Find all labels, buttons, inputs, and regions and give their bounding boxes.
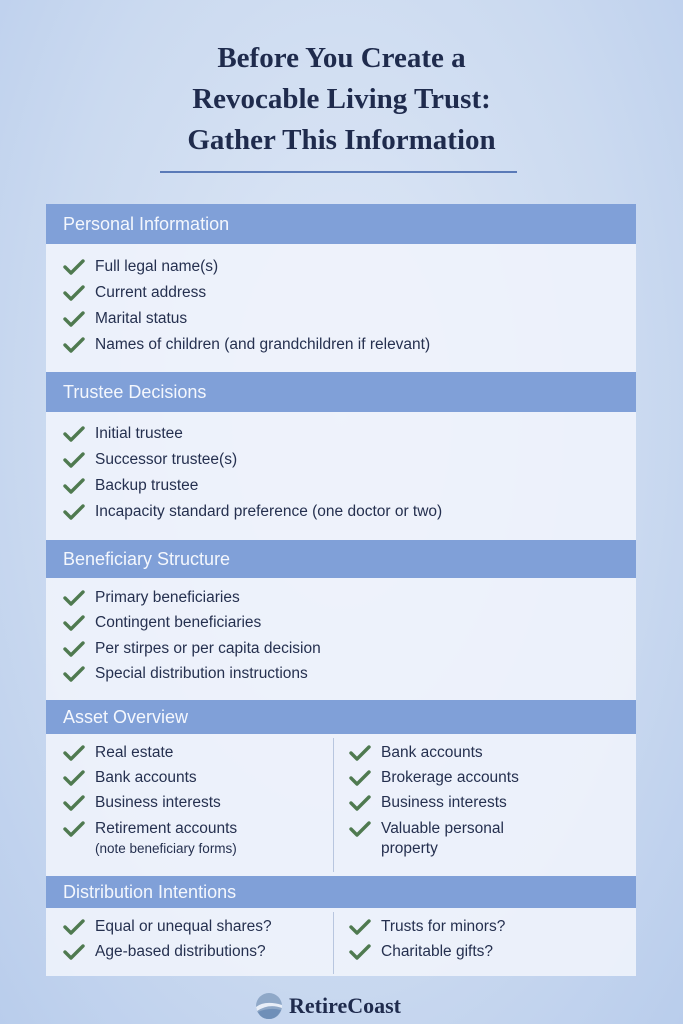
checklist items: Special distribution instructions [95,665,308,682]
heading: distribution intentions: Distribution Intentions [63,882,236,902]
checklist items: Full legal name(s) [95,258,218,275]
title [187,42,496,156]
checklist items: Per stirpes or per capita decision [95,640,321,657]
checklist items: Retirement accounts [95,820,237,837]
body: distribution intentions [46,908,636,976]
panel: trustee decisions [46,372,636,540]
heading: asset overview: Asset Overview [63,707,188,727]
checklist items: Contingent beneficiaries [95,614,261,631]
heading: beneficiary structure [46,540,636,578]
checklist items: Age-based distributions? [95,943,266,960]
checklist items: Current address [95,284,206,301]
checklist items: Incapacity standard preference (one doctor or two) [95,503,442,520]
checklist items: Business interests [95,794,221,811]
checklist items: Charitable gifts? [381,943,493,960]
title: Gather This Information [187,124,496,156]
heading: beneficiary structure: Beneficiary Structure [63,549,230,569]
checklist items: Primary beneficiaries [95,589,240,606]
checklist items: Names of children (and grandchildren if relevant) [95,336,430,353]
checklist items: Valuable personal [381,820,504,837]
title: Revocable Living Trust: [192,83,491,115]
logo: RetireCoast: RetireCoast [289,993,401,1018]
heading: distribution intentions [46,876,636,908]
body: asset overview [46,734,636,876]
panel: asset overview [46,700,636,876]
heading: asset overview [46,700,636,734]
heading: personal information [46,204,636,244]
checklist items: Successor trustee(s) [95,451,237,468]
body: beneficiary structure [46,578,636,700]
body: personal information [46,244,636,372]
checklist items: Business interests [381,794,507,811]
heading: trustee decisions [46,372,636,412]
heading: personal information: Personal Information [63,214,229,234]
checklist items: Initial trustee [95,425,183,442]
heading: trustee decisions: Trustee Decisions [63,382,206,402]
panel: distribution intentions [46,876,636,976]
checklist items: Marital status [95,310,187,327]
checklist items: Trusts for minors? [381,918,505,935]
body: trustee decisions [46,412,636,540]
checklist items: Brokerage accounts [381,769,519,786]
checklist items: Bank accounts [95,769,197,786]
icon: logo mark [256,993,282,1019]
checklist items: property [381,840,438,857]
checklist items: Backup trustee [95,477,198,494]
checklist items: Real estate [95,744,173,761]
checklist items: (note beneficiary forms) [95,841,237,856]
checklist items: Bank accounts [381,744,483,761]
title: Before You Create a [217,42,466,74]
checklist items: Equal or unequal shares? [95,918,272,935]
panel: personal information [46,204,636,372]
panel: beneficiary structure [46,540,636,700]
